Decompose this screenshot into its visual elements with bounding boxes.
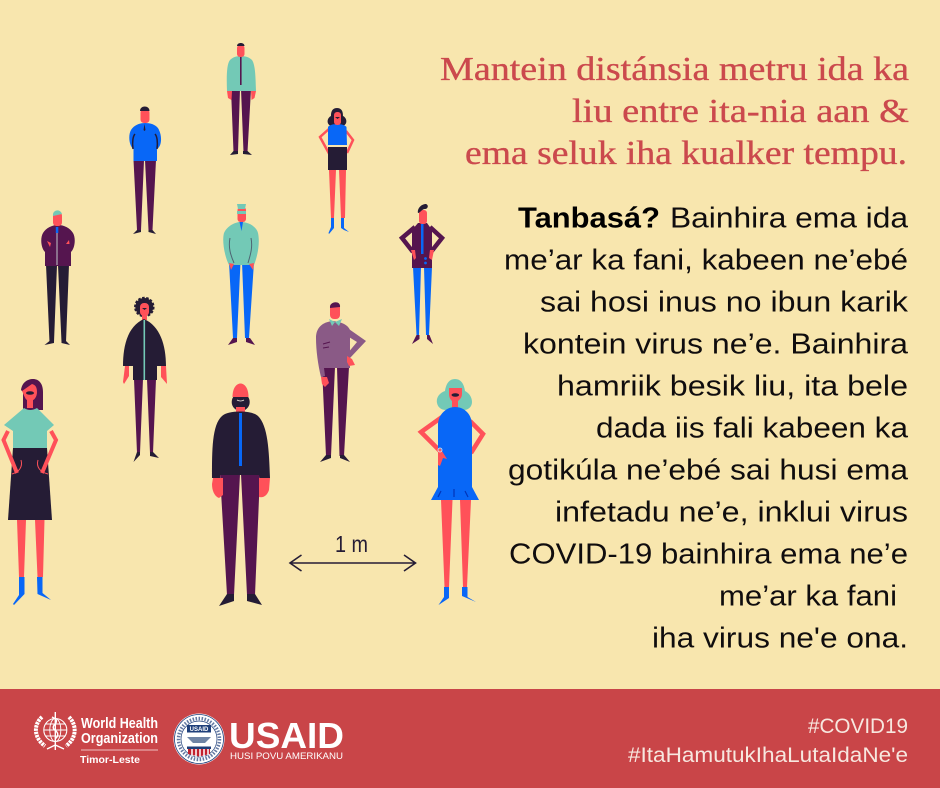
logo: World Health Organization Timor-Leste: Organization — [81, 731, 158, 747]
body text: why: hamriik besik liu, ita bele — [557, 370, 908, 402]
body text: why: iha virus ne'e ona. — [652, 622, 908, 654]
distance arrow with 1 m label: 1 m — [335, 531, 368, 557]
hashtags — [628, 715, 908, 767]
person: woman in purple jacket and blue trousers — [402, 204, 442, 344]
title: Mantein distánsia metru ida ka — [440, 51, 909, 88]
distance arrow with 1 m label — [290, 531, 416, 571]
footer band — [0, 689, 940, 788]
person: man in purple jacket and black trousers — [41, 210, 75, 345]
person: woman in teal tee and black dress — [4, 379, 56, 605]
logo: USAID: HUSI POVU AMERIKANU — [230, 751, 343, 762]
body text: why: me’ar ka fani, kabeen ne’ebé — [504, 244, 908, 276]
person: man in mauve sweater — [316, 302, 366, 462]
person: man in blue sweater — [129, 106, 161, 234]
hashtags: #COVID19 — [808, 715, 908, 738]
icon: USAID seal: USAID — [190, 727, 209, 733]
title: liu entre ita-nia aan & — [572, 93, 909, 130]
person: curly hair figure in black coat — [123, 298, 167, 462]
body text: why: sai hosi inus no ibun karik — [540, 286, 909, 318]
body text: why: gotikúla ne’ebé sai husi ema — [508, 454, 909, 486]
title: ema seluk iha kualker tempu. — [465, 135, 907, 172]
body text: why — [504, 202, 909, 654]
logo: World Health Organization Timor-Leste: World Health — [81, 716, 158, 732]
body text: why: Tanbasá? — [518, 202, 660, 234]
hashtags: #ItaHamutukIhaLutaIdaNe'e — [628, 744, 908, 767]
body text: why: kontein virus ne’e. Bainhira — [523, 328, 909, 360]
icon: WHO emblem — [36, 712, 75, 750]
icon: USAID seal — [174, 714, 224, 764]
body text: why: Bainhira ema ida — [670, 202, 909, 234]
logo: USAID — [174, 714, 344, 764]
illustration: people standing apart — [4, 43, 483, 606]
logo: World Health Organization Timor-Leste — [36, 712, 158, 766]
person: woman in blue top and black skirt — [320, 108, 353, 234]
person: man in teal sweater at top — [227, 43, 256, 155]
body text: why: COVID-19 bainhira ema ne’e — [509, 538, 908, 570]
person: man in teal sweater and blue trousers — [223, 204, 259, 345]
body text: why: me’ar ka fani — [719, 580, 897, 612]
person: woman in blue dress with teal hair — [421, 379, 483, 605]
title — [440, 51, 909, 172]
logo: World Health Organization Timor-Leste: Timor-Leste — [80, 754, 140, 766]
body text: why: infetadu ne’e, inklui virus — [555, 496, 908, 528]
body text: why: dada iis fali kabeen ka — [596, 412, 909, 444]
person: large man with beard in black coat — [212, 384, 270, 606]
logo: USAID: USAID — [229, 715, 344, 756]
